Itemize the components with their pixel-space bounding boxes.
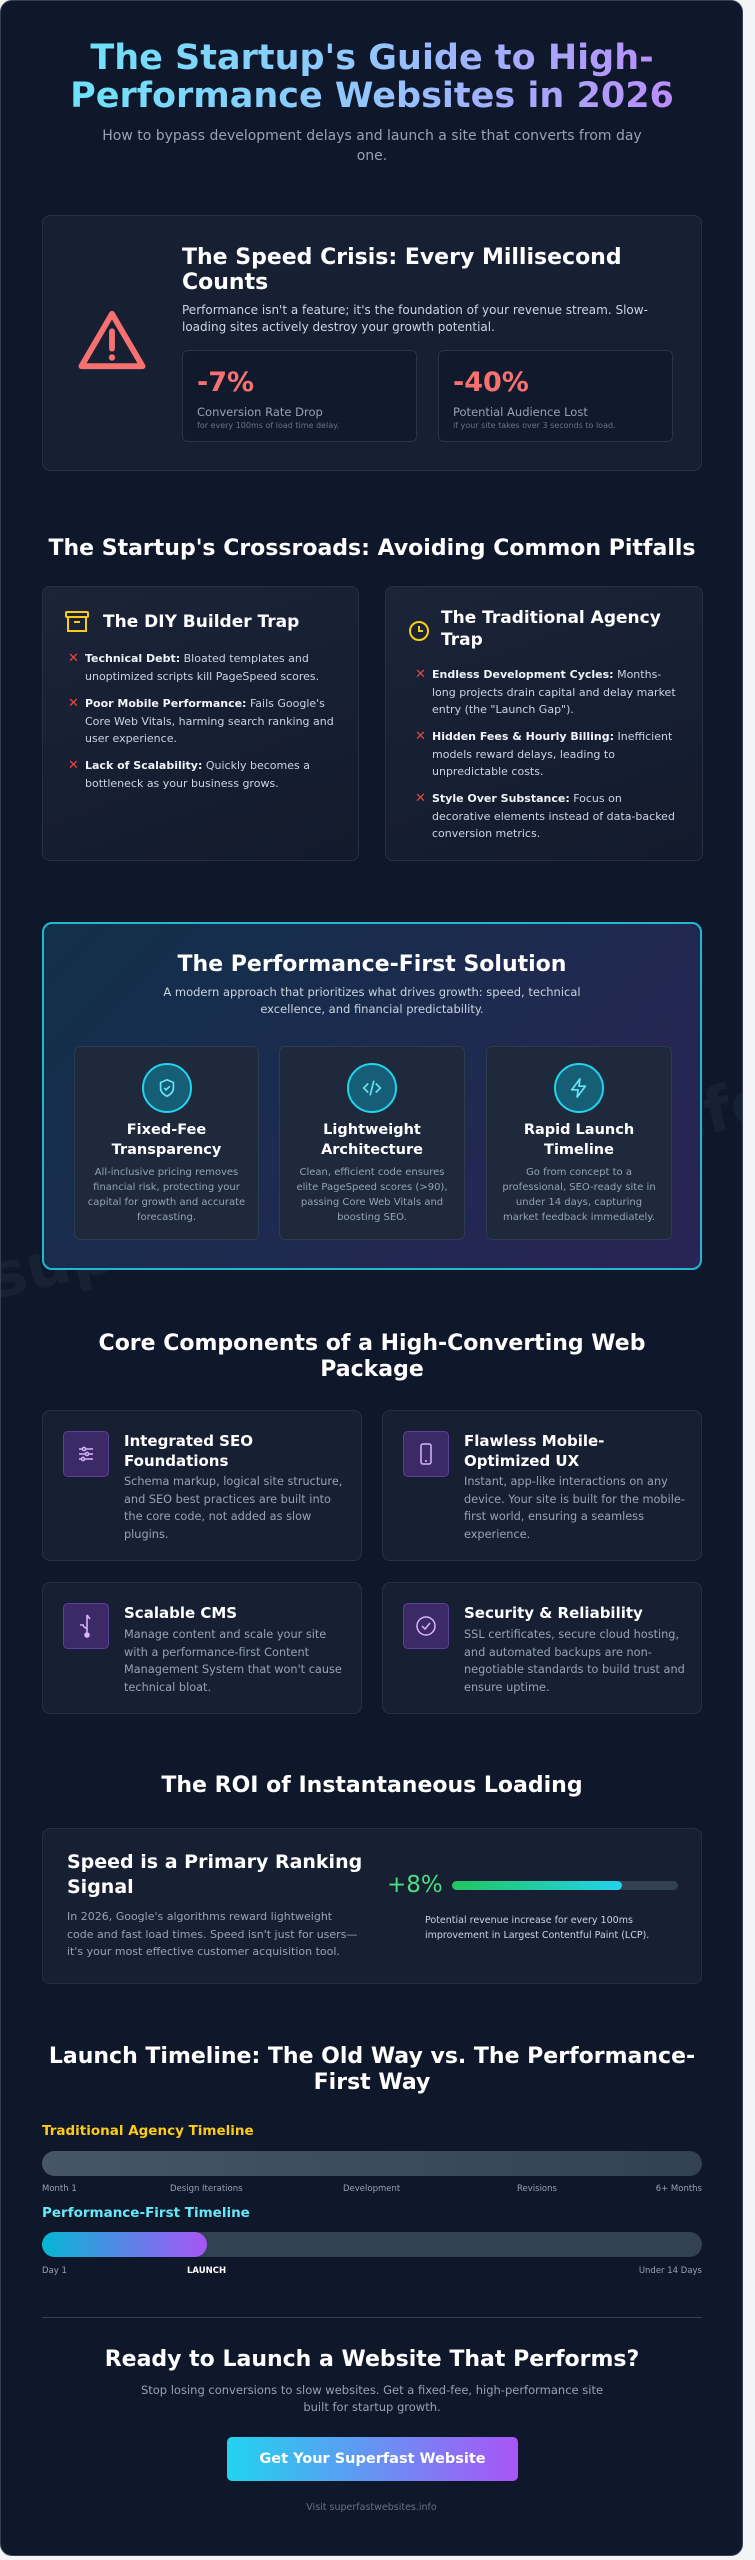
- panel: agency trap: ✕: [415, 729, 426, 744]
- card: rapid launch: Timeline: [544, 1142, 614, 1158]
- list: Poor Mobile Performance: Fails Google's Core Web Vitals, harming search ranking and user experience.: [85, 697, 334, 745]
- timeline: traditional: Revisions: [517, 2184, 557, 2194]
- panel: DIY trap: ✕: [68, 696, 79, 711]
- icon: warning: [78, 310, 146, 370]
- stat: -7%: Conversion Rate Drop: [197, 405, 323, 419]
- icon: shield: [142, 1063, 192, 1113]
- heading: launch timeline: Launch Timeline: The Old Way vs. The Performance-First Way: [49, 2044, 695, 2095]
- card: CMS: Scalable CMS: [124, 1604, 237, 1622]
- title: The Startup's Guide to High-: [90, 38, 654, 78]
- panel: DIY trap: ✕: [68, 651, 79, 666]
- timeline: traditional: Month 1: [42, 2184, 77, 2194]
- heading: The Performance-First Solution: [178, 952, 566, 977]
- CTA button: Get Your Superfast Website: [259, 2451, 486, 2467]
- card: fixed fee: Transparency: [112, 1142, 221, 1158]
- panel: speed crisis: [42, 215, 702, 471]
- list: [415, 667, 676, 840]
- timeline: traditional: 6+ Months: [656, 2184, 702, 2194]
- timeline: traditional: Design Iterations: [170, 2184, 243, 2194]
- icon: check circle: [403, 1603, 449, 1649]
- heading: ROI: The ROI of Instantaneous Loading: [161, 1773, 583, 1798]
- stat bar: +8%: [387, 1872, 443, 1898]
- card: mobile: [382, 1410, 702, 1561]
- CTA heading: Ready to Launch a Website That Performs?: [105, 2347, 639, 2372]
- stat: -40%: Potential Audience Lost: [453, 405, 588, 419]
- title: [21, 39, 723, 115]
- subheading: A modern approach that prioritizes what drives growth: speed, technical excellence, and financial predictability.: [163, 985, 581, 1016]
- panel: DIY trap: [42, 586, 359, 861]
- footer link: Visit superfastwebsites.info: [306, 2502, 437, 2513]
- CTA button: [227, 2437, 518, 2481]
- panel: DIY trap: ✕: [68, 758, 79, 773]
- list: [68, 651, 334, 790]
- card: fixed fee: All-inclusive pricing removes financial risk, protecting your capital for growth and accurate forecasting.: [88, 1167, 245, 1223]
- heading: core components: Core Components of a High-Converting Web Package: [99, 1331, 645, 1382]
- card: SEO: [42, 1410, 362, 1561]
- card: rapid launch: Go from concept to a professional, SEO-ready site in under 14 days, capturing market feedback immediately.: [502, 1167, 656, 1223]
- timeline: performance-first: Performance-First Timeline: [42, 2205, 250, 2221]
- stat: -7%: -7%: [197, 367, 254, 398]
- icon: bolt: [554, 1063, 604, 1113]
- card: lightweight: Architecture: [321, 1142, 423, 1158]
- stat: -40%: if your site takes over 3 seconds to load.: [453, 421, 616, 430]
- list: Endless Development Cycles: Months-long projects drain capital and delay market entry (the "Launch Gap").: [432, 668, 676, 716]
- list: Style Over Substance: Focus on decorative elements instead of data-backed conversion metrics.: [432, 792, 675, 840]
- stat: -7%: for every 100ms of load time delay.: [197, 421, 339, 430]
- panel: ROI: [42, 1828, 702, 1984]
- card: rapid launch: [486, 1046, 672, 1240]
- card: SEO: Integrated SEO Foundations: [124, 1432, 253, 1470]
- card: lightweight: Lightweight: [323, 1122, 421, 1138]
- timeline: performance-first: LAUNCH: [187, 2266, 226, 2276]
- subtitle: How to bypass development delays and launch a site that converts from day one.: [102, 128, 642, 164]
- icon: phone: [403, 1431, 449, 1477]
- timeline: traditional: [42, 2123, 702, 2194]
- heading: crossroads: The Startup's Crossroads: Avoiding Common Pitfalls: [48, 536, 696, 561]
- card: lightweight: Clean, efficient code ensures elite PageSpeed scores (>90), passing Core Web Vitals and boosting SEO.: [296, 1167, 448, 1223]
- icon: usb: [63, 1603, 109, 1649]
- list: Technical Debt: Bloated templates and unoptimized scripts kill PageSpeed scores.: [85, 652, 319, 682]
- panel: agency trap: [385, 586, 703, 861]
- list: Lack of Scalability: Quickly becomes a bottleneck as your business grows.: [85, 759, 310, 790]
- timeline: traditional: Traditional Agency Timeline: [42, 2123, 254, 2139]
- timeline: traditional: Development: [343, 2184, 400, 2194]
- card: security: [382, 1582, 702, 1714]
- title: Performance Websites in 2026: [70, 76, 674, 116]
- stat: -40%: -40%: [453, 367, 529, 398]
- list: Hidden Fees & Hourly Billing: Inefficient models reward delays, leading to unpredictable costs.: [432, 730, 672, 778]
- card: mobile: Flawless Mobile-Optimized UX: [464, 1432, 604, 1470]
- timeline: performance-first: [42, 2205, 702, 2276]
- stat: -40%: [438, 350, 673, 442]
- CTA text: Stop losing conversions to slow websites. Get a fixed-fee, high-performance site built for startup growth.: [141, 2383, 603, 2414]
- card: mobile: Instant, app-like interactions on any device. Your site is built for the mobile-first world, ensuring a seamless experience.: [464, 1475, 685, 1540]
- card: fixed fee: Fixed-Fee: [127, 1122, 206, 1138]
- icon: sliders: [63, 1431, 109, 1477]
- card: CMS: Manage content and scale your site with a performance-first Content Management System that won't cause technical bloat.: [124, 1628, 342, 1694]
- panel: performance-first solution: [42, 922, 702, 1270]
- panel: ROI: In 2026, Google's algorithms reward lightweight code and fast load times. Speed isn't just for users—it's your most effective customer acquisition tool.: [67, 1910, 357, 1958]
- timeline: performance-first: Day 1: [42, 2266, 67, 2276]
- panel: agency trap: ✕: [415, 791, 426, 806]
- text: Performance isn't a feature; it's the foundation of your revenue stream. Slow-loading sites actively destroy your growth potential.: [182, 303, 648, 334]
- text block: Speed is a Primary Ranking Signal: [67, 1851, 362, 1898]
- panel: ROI: Potential revenue increase for every 100ms improvement in Largest Contentful Paint (LCP).: [425, 1915, 649, 1941]
- timeline: performance-first: Under 14 Days: [639, 2266, 702, 2276]
- icon: box: [65, 611, 89, 632]
- heading: The Speed Crisis: Every Millisecond Counts: [182, 245, 622, 295]
- card: SEO: Schema markup, logical site structure, and SEO best practices are built into the core code, not added as slow plugins.: [124, 1475, 342, 1540]
- panel: agency trap: ✕: [415, 667, 426, 682]
- card: security: SSL certificates, secure cloud hosting, and automated backups are non-negotiable standards to build trust and ensure uptime.: [464, 1628, 685, 1694]
- stat: -7%: [182, 350, 417, 442]
- icon: clock: [409, 621, 429, 641]
- card title: The DIY Builder Trap: [103, 612, 299, 632]
- card: rapid launch: Rapid Launch: [524, 1122, 634, 1138]
- card: fixed fee: [74, 1046, 259, 1240]
- card: lightweight: [279, 1046, 465, 1240]
- card title: The Traditional Agency Trap: [441, 608, 661, 650]
- icon: code: [347, 1063, 397, 1113]
- card: security: Security & Reliability: [464, 1604, 643, 1622]
- card: CMS: [42, 1582, 362, 1714]
